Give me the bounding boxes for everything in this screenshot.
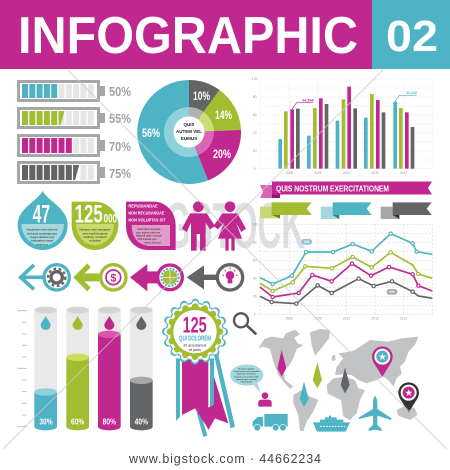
flag: teal: [321, 202, 372, 219]
badge: magenta leaf: eligendi optio cumque: [136, 234, 162, 238]
map pins: [277, 350, 350, 407]
bar callouts: 11,142: [406, 91, 417, 95]
line axis labels: 2009: [314, 316, 322, 320]
badge: magenta leaf: NON RECUSANDAE: [128, 211, 164, 216]
badge: magenta leaf: nihil impedit quo: [137, 237, 157, 241]
flag: green: [260, 202, 312, 218]
cylinder 80%: 80%: [103, 417, 116, 426]
line axis labels: 2011: [371, 316, 379, 320]
woman: [213, 201, 246, 251]
badge: teal drop 47: sed quia consequuntur: [27, 231, 57, 235]
line axis labels: 40: [253, 277, 257, 281]
cylinder chart: [17, 307, 153, 430]
badge: teal drop 47: 47: [33, 202, 50, 229]
line axis labels: 2012: [400, 316, 408, 320]
rosette text: et justo: [189, 348, 201, 352]
arrow icons row: [21, 263, 243, 291]
speech bubble: distinctio nam libero: [237, 373, 257, 376]
badge: teal drop 47: magni dolores eos: [30, 235, 55, 239]
pie center text: QUIS: [183, 122, 195, 127]
arrow: gray bulb: [187, 265, 243, 290]
badge: teal drop 47: nesciunt: [36, 242, 48, 246]
header banner: [0, 0, 450, 69]
battery 70%: 70%: [109, 139, 131, 154]
badge: green 125 000: vero modi tempora: [83, 231, 108, 235]
flag ribbons: [260, 202, 432, 219]
cylinder 40%: 40%: [135, 417, 148, 426]
bar axis labels: 100: [252, 77, 258, 81]
speech bubble: nihil impedit: [241, 381, 252, 384]
badge: green 125 000: 125: [75, 202, 103, 229]
icon: magnifier: [234, 313, 256, 334]
ribbon heading: QUIS NOSTRUM EXERCITATIONEM: [276, 184, 389, 194]
badge: teal drop 47: Asperiores sed velit est: [27, 228, 58, 232]
icon: couple: [182, 201, 246, 251]
icon: ship: [313, 416, 350, 432]
badge: teal drop 47: [18, 191, 68, 250]
line axis labels: 0: [254, 313, 256, 317]
icon: plane: [359, 396, 392, 431]
badge: green 125 000: [72, 202, 118, 250]
arrow: teal gear: [21, 265, 69, 290]
pie labels: 56%: [142, 126, 160, 140]
location marker: dark: ★: [404, 388, 413, 398]
footer credit: www.bigstock.com · 44662234: [128, 452, 321, 466]
bar axis labels: 2008: [286, 171, 293, 175]
line callouts: [301, 239, 397, 295]
line axis labels: [252, 223, 408, 320]
pie labels: 14%: [215, 108, 232, 122]
location marker: dark: [398, 382, 419, 412]
title: INFOGRAPHIC: [18, 7, 358, 65]
badge: magenta leaf: NON VOLUPTAS SIT: [128, 218, 166, 223]
battery 55%: 55%: [109, 111, 131, 126]
line axis labels: 60: [253, 259, 257, 263]
line axis labels: 80: [253, 241, 257, 245]
line chart: [252, 223, 432, 320]
bar axis labels: 2012: [400, 171, 408, 175]
bar axis labels: 80: [253, 95, 257, 99]
location marker: magenta: ★: [378, 352, 387, 362]
rosette text: QUI DOLOREM: [179, 333, 211, 342]
speech bubble: Et harum quidem: [238, 367, 255, 370]
badge: magenta leaf: [126, 202, 176, 250]
cylinder 60%: 60%: [71, 417, 84, 426]
flag: gray: [381, 202, 432, 219]
bar chart: [252, 77, 433, 175]
bar axis labels: 40: [253, 131, 257, 135]
speech bubble: rerum facilis est et expedita: [233, 370, 260, 373]
header banner: 02: [386, 12, 438, 61]
info badges: [18, 191, 176, 250]
badge: green 125 000: et dolore: [89, 239, 101, 243]
line: green: [260, 251, 432, 293]
rosette text: 125: [183, 312, 207, 337]
bar axis labels: [252, 77, 408, 175]
award rosette: [166, 303, 235, 437]
line callouts: 033: [304, 240, 310, 244]
cylinder 30%: 30%: [39, 417, 53, 426]
location marker: magenta: [372, 346, 393, 377]
arrow: magenta globe: [130, 264, 182, 291]
cylinder axis ticks: [17, 311, 27, 427]
pie center text: EUMUS: [181, 136, 197, 141]
line: magenta: [260, 262, 432, 299]
map section: [230, 313, 419, 432]
badge: teal drop 47: voluptatem sequi: [31, 239, 54, 243]
pie center text: [176, 122, 202, 141]
battery 75%: 75%: [109, 166, 131, 181]
rosette seal: [166, 303, 224, 361]
badge: magenta leaf: cum soluta nobis est: [136, 230, 160, 234]
bar axis labels: 2011: [371, 171, 379, 175]
diagonal watermark lines: [3, 70, 447, 449]
speech bubble: tempore cum soluta nobis: [234, 375, 259, 378]
bar callouts: [292, 91, 417, 109]
battery progress bars: [18, 82, 131, 182]
line axis labels: 2008: [286, 316, 293, 320]
speech bubble: eligendi optio cumque: [236, 378, 258, 381]
pie chart: [137, 80, 241, 184]
world map: [258, 329, 418, 431]
speech bubble: [230, 364, 263, 393]
line axis labels: 20: [253, 295, 257, 299]
rosette ribbons: [176, 355, 235, 437]
bar axis labels: 20: [253, 149, 257, 153]
ribbon heading: [260, 182, 432, 198]
badge: green 125 000: Nostrum sed numquam: [79, 228, 111, 232]
icon: person: [258, 392, 272, 407]
bar axis labels: 2009: [314, 171, 322, 175]
pie center text: AUTEM VEL: [176, 129, 202, 134]
arrow: green dollar: $: [110, 272, 116, 284]
pie labels: 10%: [193, 89, 210, 103]
bar axis labels: 60: [253, 113, 257, 117]
badge: green 125 000: incidunt, ut labore: [83, 235, 107, 239]
icon: truck: [253, 414, 288, 431]
rosette text: [179, 312, 211, 352]
bar callouts: 44,344: [302, 99, 314, 103]
arrow: green dollar: [73, 263, 126, 291]
bar axis labels: 2010: [343, 171, 351, 175]
rosette text: Et accusamus: [184, 344, 207, 348]
line axis labels: 2010: [343, 316, 351, 320]
line: gray: [260, 277, 432, 305]
bar axis labels: 0: [254, 167, 256, 171]
badge: magenta leaf: REPUDIANDAE: [128, 204, 158, 209]
line: teal: [260, 232, 432, 286]
line callouts: 033: [389, 290, 395, 294]
badge: magenta leaf: minus id quod: [144, 240, 161, 244]
line axis labels: 100: [252, 223, 258, 227]
pie labels: [142, 89, 232, 161]
pie labels: 20%: [213, 147, 231, 161]
watermark: GSTOCK: [165, 189, 305, 262]
battery 50%: 50%: [109, 84, 131, 99]
badge: green 125 000: 000: [104, 212, 117, 226]
badge: magenta leaf: Nam libero tempore: [137, 227, 161, 231]
man: [182, 201, 215, 251]
